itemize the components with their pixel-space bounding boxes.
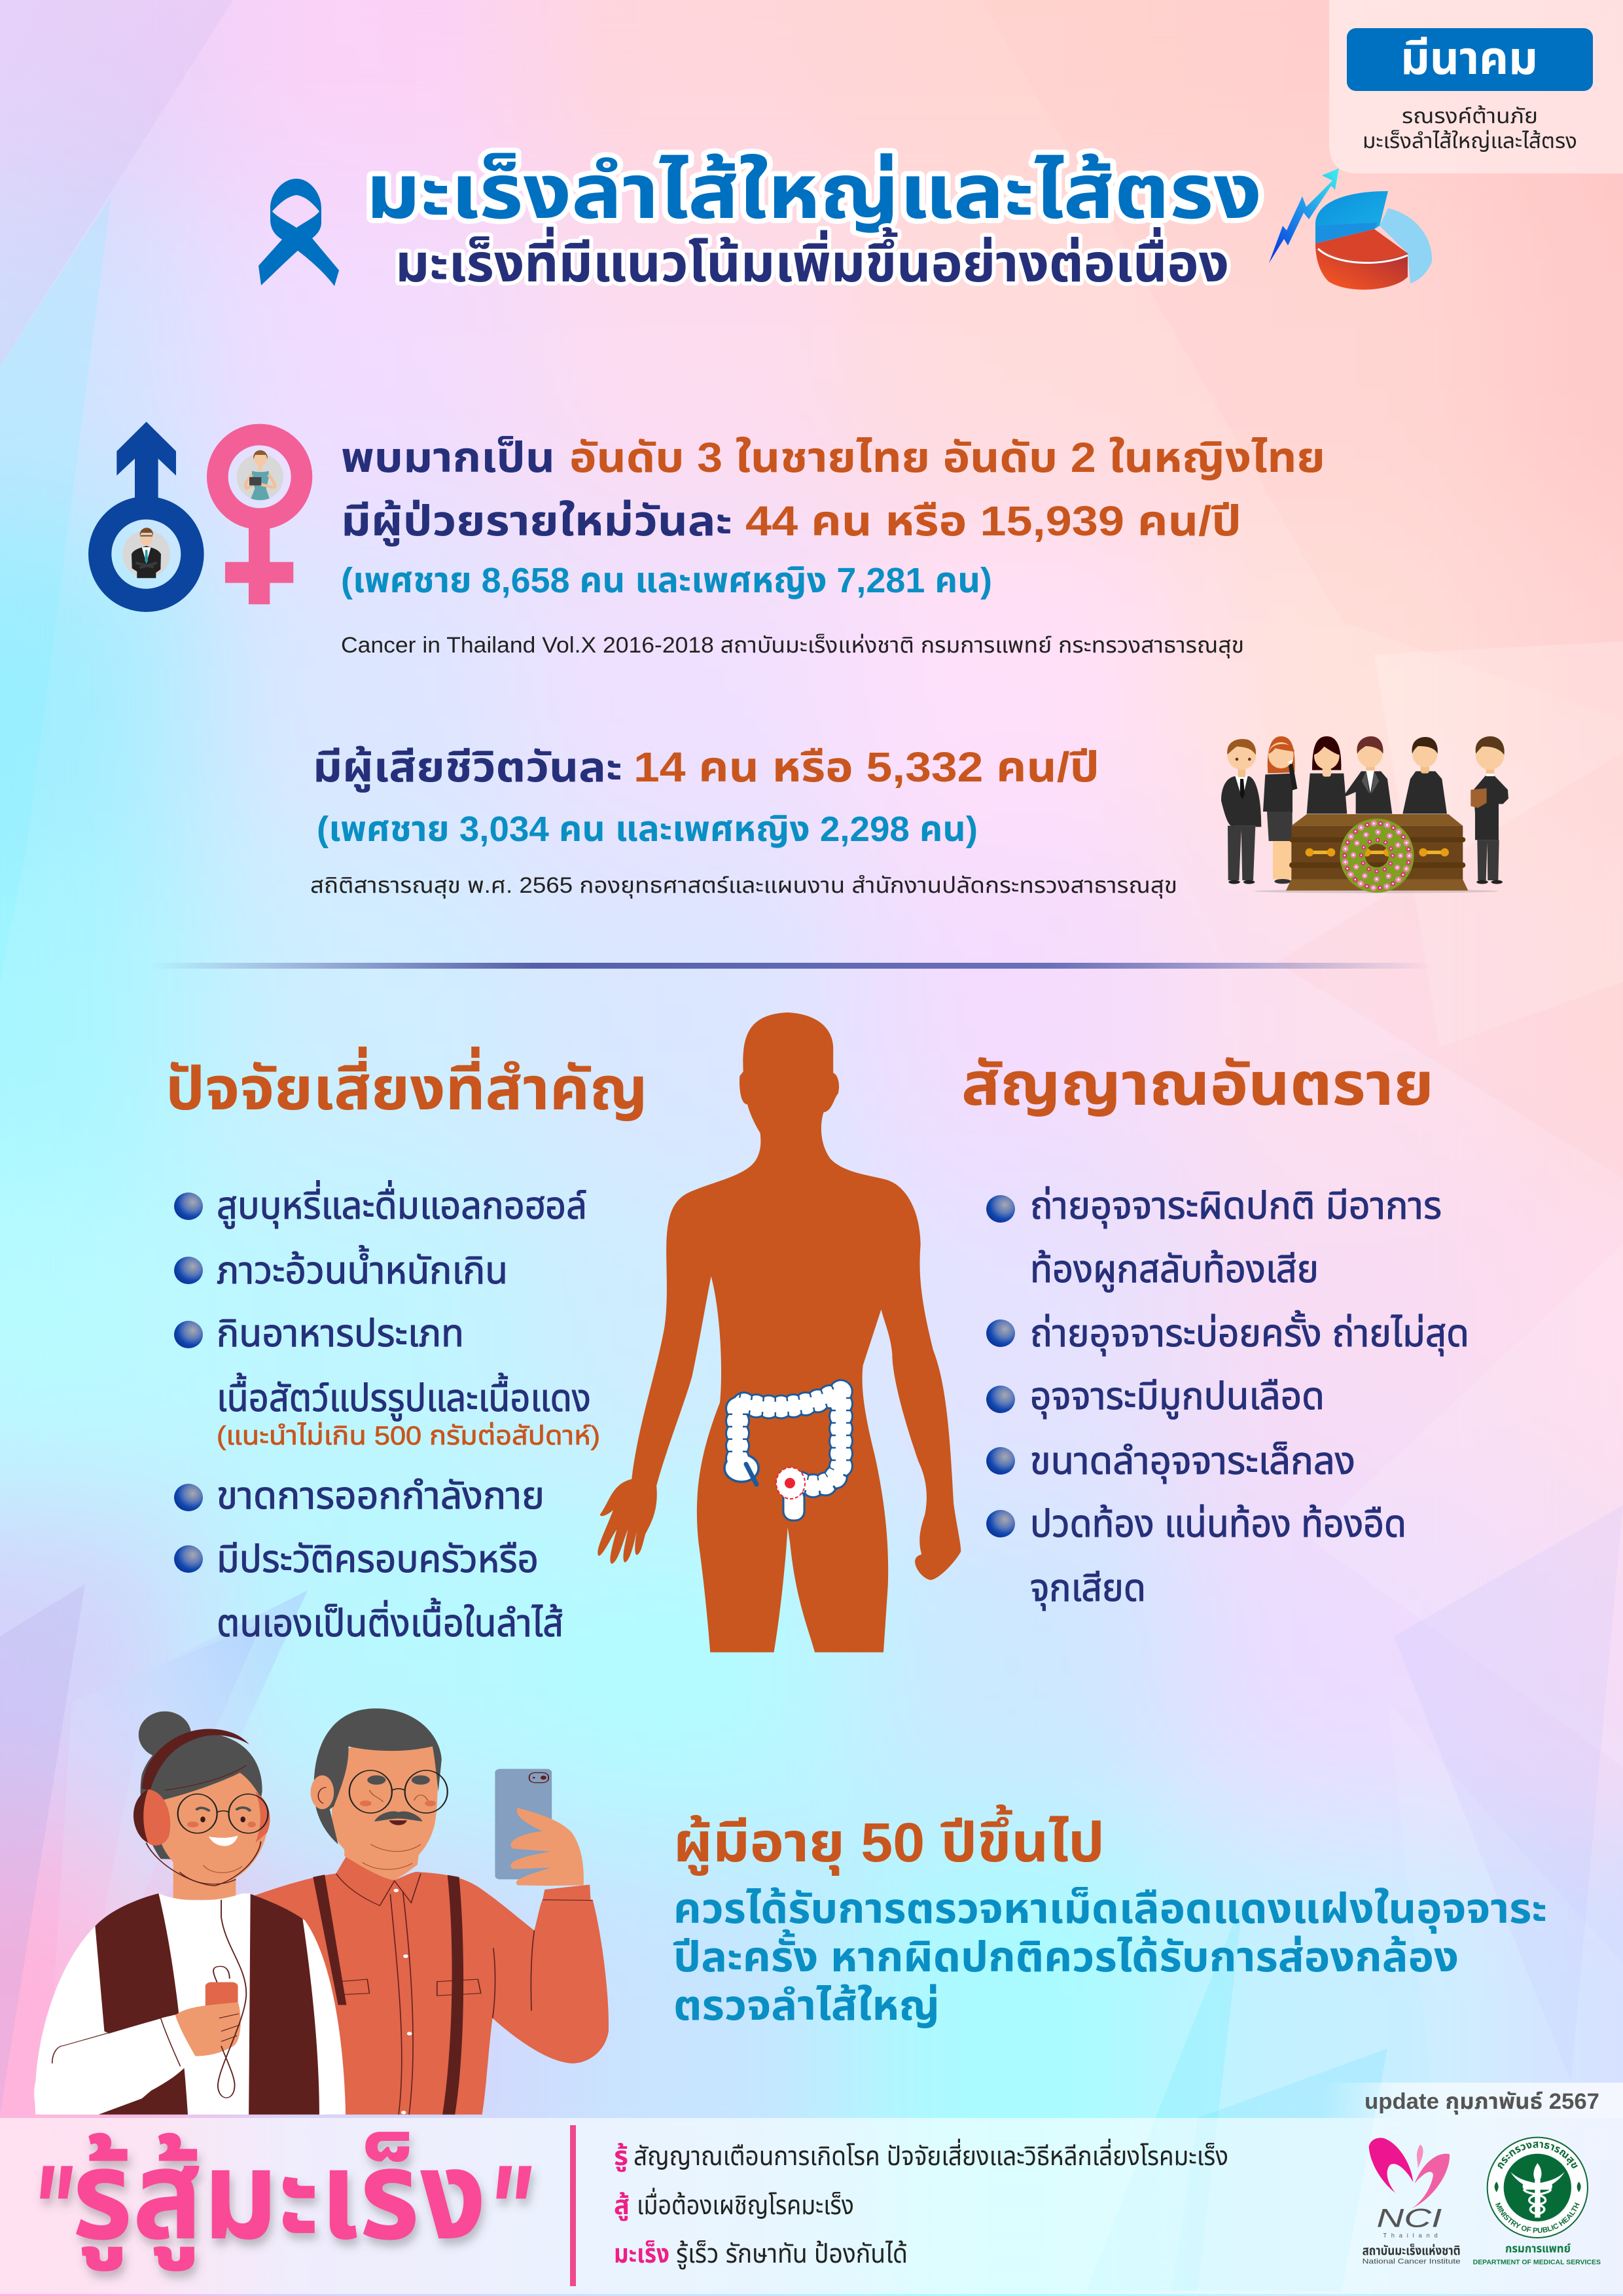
mourner 1 <box>1221 739 1261 884</box>
slogan explanation: มะเร็ง <box>614 2240 669 2269</box>
panel: month tag: รณรงค์ต้านภัย <box>1402 104 1538 128</box>
panel: month tag: มะเร็งลำไส้ใหญ่และไส้ตรง <box>1363 129 1577 152</box>
stat: deaths: 14 คน หรือ 5,332 คน/ปี <box>633 744 1099 791</box>
callout: age 50 screening: ควรได้รับการตรวจหาเม็ดเลือดแดงแฝงในอุจจาระ <box>673 1885 1547 1934</box>
mourner 3 <box>1307 736 1347 814</box>
stat: deaths <box>310 744 1177 899</box>
list: risk factors: เนื้อสัตว์แปรรูปและเนื้อแดง <box>217 1372 591 1421</box>
footer panel <box>0 2118 1623 2294</box>
coffin <box>1286 814 1468 891</box>
slogan explanation: สัญญาณเตือนการเกิดโรค ปัจจัยเสี่ยงและวิธีหลีกเลี่ยงโรคมะเร็ง <box>633 2138 1228 2171</box>
list: risk factors <box>174 1180 600 1645</box>
phone <box>495 1769 552 1879</box>
list: warning signs <box>986 1185 1469 1611</box>
list: risk factors: ภาวะอ้วนน้ำหนักเกิน <box>217 1245 508 1292</box>
update tag: update กุมภาพันธ์ 2567 <box>1364 2089 1599 2115</box>
stat: deaths: สถิติสาธารณสุข พ.ศ. 2565 กองยุทธศาสตร์และแผนงาน สำนักงานปลัดกระทรวงสาธารณสุข <box>310 873 1177 899</box>
logo: Ministry of Public Health <box>1473 2136 1601 2266</box>
callout: age 50 screening: ปีละครั้ง หากผิดปกติควรได้รับการส่องกล้อง <box>673 1929 1459 1981</box>
logo: Ministry of Public Health: กระทรวงสาธารณสุข <box>1497 2142 1578 2169</box>
stat: deaths: มีผู้เสียชีวิตวันละ <box>313 744 622 793</box>
stat: new patients: มีผู้ป่วยรายใหม่วันละ <box>341 497 732 547</box>
logo: Ministry of Public Health: กรมการแพทย์ <box>1505 2242 1571 2255</box>
stat: deaths: (เพศชาย 3,034 คน และเพศหญิง 2,298 คน) <box>317 810 978 849</box>
mourner 5 <box>1402 737 1447 814</box>
icon: male symbol <box>100 422 192 600</box>
list: risk factors: กินอาหารประเภท <box>217 1312 464 1355</box>
panel: month tag <box>1329 0 1623 173</box>
list: risk factors: ตนเองเป็นติ่งเนื้อในลำไส้ <box>217 1598 563 1645</box>
woman <box>34 1712 346 2115</box>
mourner 4 <box>1345 736 1392 814</box>
slogan explanation: รู้เร็ว รักษาทัน ป้องกันได้ <box>676 2240 908 2269</box>
list: risk factors: มีประวัติครอบครัวหรือ <box>217 1538 539 1581</box>
title: มะเร็งลำไส้ใหญ่และไส้ตรง <box>366 149 1262 234</box>
list: risk factors: ขาดการออกกำลังกาย <box>217 1475 544 1517</box>
stat: new patients: พบมากเป็น <box>341 434 555 481</box>
icon: colon <box>724 1391 841 1520</box>
logo: National Cancer Institute: Thailand <box>1383 2233 1438 2239</box>
callout: age 50 screening: ตรวจลำไส้ใหญ่ <box>673 1982 940 2029</box>
stat: new patients: (เพศชาย 8,658 คน และเพศหญิง 7,281 คน) <box>341 561 992 600</box>
icon: female symbol <box>217 435 302 604</box>
heading: risk factors: ปัจจัยเสี่ยงที่สำคัญ <box>166 1047 648 1122</box>
icon: blue ribbon <box>259 179 339 286</box>
heading: warning signs: สัญญาณอันตราย <box>961 1051 1434 1118</box>
slogan: รู้สู้มะเร็ง <box>72 2126 486 2272</box>
icon: human body silhouette <box>597 1013 961 1652</box>
list: warning signs: ปวดท้อง แน่นท้อง ท้องอืด <box>1030 1503 1406 1545</box>
title <box>366 149 1262 293</box>
logo: National Cancer Institute: สถาบันมะเร็งแห่งชาติ <box>1363 2243 1461 2258</box>
mourner 6: priest <box>1471 736 1508 884</box>
illustration: elderly couple <box>34 1708 609 2115</box>
logo: National Cancer Institute: National Cancer Institute <box>1363 2257 1461 2265</box>
stat: new patients: Cancer in Thailand Vol.X 2016-2018 สถาบันมะเร็งแห่งชาติ กรมการแพทย์ กระทรวงสาธารณสุข <box>341 633 1244 658</box>
icon: pie chart with rising arrow <box>1269 168 1432 290</box>
flower wreath <box>1345 823 1409 888</box>
man <box>255 1708 609 2115</box>
slogan: " <box>31 2138 73 2284</box>
list: warning signs: ท้องผูกสลับท้องเสีย <box>1030 1248 1319 1292</box>
list: risk factors: สูบบุหรี่และดื่มแอลกอฮอล์ <box>217 1180 587 1229</box>
mourner 2 <box>1263 736 1297 884</box>
list: warning signs: จุกเสียด <box>1030 1567 1146 1611</box>
logo: Ministry of Public Health: MINISTRY OF PUBLIC HEALTH <box>1495 2202 1580 2233</box>
slogan explanation: สู้ <box>614 2191 630 2221</box>
callout: age 50 screening: ผู้มีอายุ 50 ปีขึ้นไป <box>673 1804 1105 1876</box>
logo: National Cancer Institute <box>1363 2138 1461 2265</box>
panel: month tag: มีนาคม <box>1400 33 1538 84</box>
slogan explanation: รู้ <box>614 2142 628 2172</box>
icon: mourners around coffin <box>1221 736 1508 893</box>
title: มะเร็งที่มีแนวโน้มเพิ่มขึ้นอย่างต่อเนื่อง <box>395 227 1229 293</box>
callout: age 50 screening <box>673 1804 1547 2029</box>
list: warning signs: ถ่ายอุจจาระผิดปกติ มีอาการ <box>1030 1185 1442 1229</box>
slogan: " <box>486 2138 532 2284</box>
list: warning signs: อุจจาระมีมูกปนเลือด <box>1030 1375 1325 1419</box>
list: warning signs: ถ่ายอุจจาระบ่อยครั้ง ถ่ายไม่สุด <box>1030 1310 1469 1356</box>
slogan explanation: เมื่อต้องเผชิญโรคมะเร็ง <box>637 2187 854 2220</box>
logo: National Cancer Institute: NCI <box>1376 2204 1442 2233</box>
stat: new patients <box>341 434 1325 658</box>
list: risk factors: (แนะนำไม่เกิน 500 กรัมต่อสัปดาห์) <box>217 1422 600 1450</box>
list: warning signs: ขนาดลำอุจจาระเล็กลง <box>1030 1440 1355 1484</box>
update tag <box>1322 2083 1623 2118</box>
slogan explanation <box>614 2138 1228 2269</box>
stat: new patients: อันดับ 3 ในชายไทย อันดับ 2 ในหญิงไทย <box>569 434 1325 481</box>
stat: new patients: 44 คน หรือ 15,939 คน/ปี <box>745 497 1241 545</box>
logo: Ministry of Public Health: DEPARTMENT OF MEDICAL SERVICES <box>1473 2259 1601 2266</box>
